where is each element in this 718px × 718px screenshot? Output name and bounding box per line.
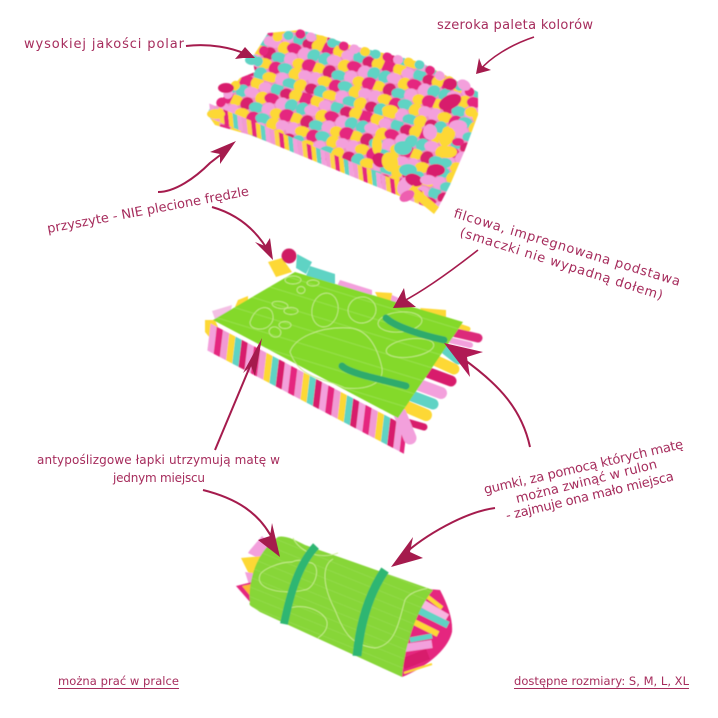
elastic band 1 bbox=[386, 318, 444, 340]
label: elastic bands: gumki, za pomocą których matę bbox=[483, 437, 685, 498]
front fringe bbox=[210, 111, 425, 199]
roll body bbox=[249, 537, 433, 677]
mat pile bbox=[208, 30, 478, 210]
large tufts, right side and corner bbox=[207, 55, 477, 214]
stitching bbox=[259, 538, 428, 648]
note: available sizes: dostępne rozmiary: S, M, L, XL bbox=[514, 674, 690, 688]
elastic band 1 bbox=[284, 546, 316, 624]
right fringe bbox=[398, 323, 478, 438]
arrow: to felt base bbox=[393, 250, 478, 308]
elastic band 2 bbox=[342, 366, 406, 386]
label: felt base: filcowa, impregnowana podstawa bbox=[452, 206, 682, 290]
label: felt base: (smaczki nie wypadną dołem) bbox=[458, 226, 664, 304]
arrow: to anti-slip paws bbox=[215, 338, 262, 450]
label: anti-slip paws: jednym miejscu bbox=[112, 471, 205, 485]
front fringe bbox=[209, 337, 405, 440]
label: high quality fleece: wysokiej jakości polar bbox=[24, 37, 185, 52]
arrow: to rolled elastic bbox=[391, 508, 495, 567]
back and left edge bumps bbox=[213, 34, 470, 112]
arrow: to rolled mat bbox=[203, 490, 280, 557]
note: machine washable: można prać w pralce bbox=[58, 674, 179, 688]
arrow: to colour palette bbox=[476, 37, 534, 74]
right end fringe bbox=[400, 589, 452, 677]
product: shaggy fleece mat, top view bbox=[207, 30, 478, 214]
arrow: to sewn fringe on top mat bbox=[158, 141, 236, 192]
label: elastic bands: można zwinąć w rulon bbox=[514, 457, 659, 507]
label: wide colour palette: szeroka paleta kolorów bbox=[437, 18, 593, 33]
label: elastic bands bbox=[483, 437, 685, 524]
green felt base bbox=[213, 272, 463, 418]
label: anti-slip paws bbox=[37, 453, 280, 485]
label: elastic bands: - zajmuje ona mało miejsca bbox=[504, 469, 675, 524]
label: sewn fringe: przyszyte - NIE plecione frędzle bbox=[46, 184, 250, 237]
arrow: to fleece bbox=[186, 45, 255, 59]
arrow: to underside fringe bbox=[212, 207, 273, 260]
label: anti-slip paws: antypoślizgowe łapki utrzymują matę w bbox=[37, 453, 280, 467]
arrow: to elastic bands bbox=[444, 343, 530, 447]
elastic band 2 bbox=[357, 570, 385, 656]
back fringe bbox=[205, 248, 446, 338]
product: mat underside with green felt base bbox=[205, 248, 478, 440]
left fringe bbox=[236, 536, 272, 606]
product: rolled mat bbox=[236, 536, 452, 677]
paw stitching bbox=[250, 276, 435, 388]
